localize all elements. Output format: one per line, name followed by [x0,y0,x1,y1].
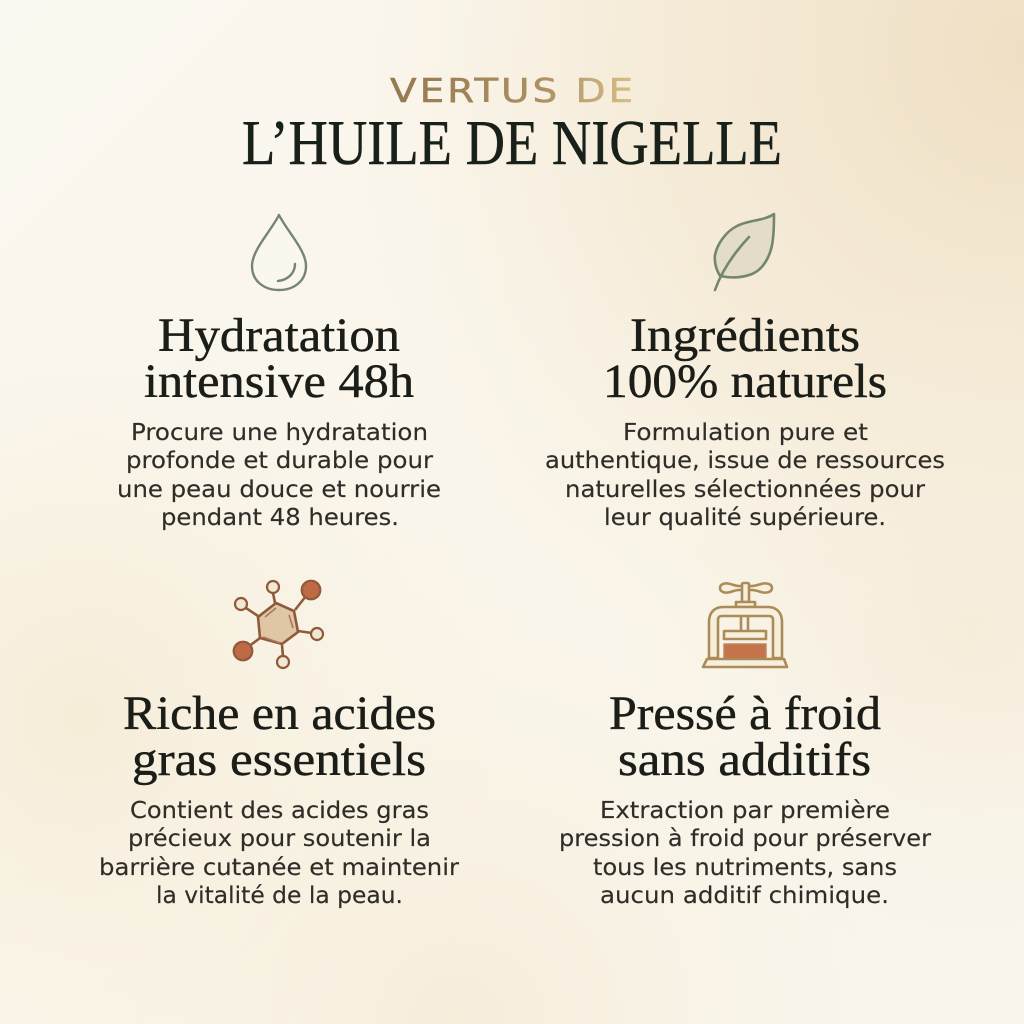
description: pendant 48 heures. [161,503,399,531]
panel: acides gras [99,581,459,909]
description: barrière cutanée et maintenir [99,853,459,881]
description: tous les nutriments, sans [593,853,897,881]
description [559,796,931,909]
heading: intensive 48h [144,355,414,408]
heading [603,309,887,408]
heading: Riche en acides [123,687,436,740]
description: Formulation pure et [623,418,868,446]
description: précieux pour soutenir la [128,824,431,852]
description: pression à froid pour préserver [559,824,931,852]
description [99,796,459,909]
description: aucun additif chimique. [600,881,889,909]
icon: leaf [715,214,774,290]
description: une peau douce et nourrie [117,475,441,503]
description: Procure une hydratation [131,418,428,446]
icon: press [703,583,787,667]
panel: hydratation [117,215,441,531]
heading: 100% naturels [603,355,887,408]
icon: molecule [234,581,323,668]
heading [123,687,436,786]
heading: Pressé à froid [609,687,881,740]
description: Extraction par première [600,796,890,824]
description: la vitalité de la peau. [156,881,403,909]
heading [144,309,414,408]
description [117,418,441,531]
description: naturelles sélectionnées pour [565,475,925,503]
heading [609,687,881,786]
title eyebrow: VERTUS DE [390,71,636,110]
description: leur qualité supérieure. [604,503,886,531]
title [242,71,782,178]
panel: ingredients [545,214,945,531]
heading: Ingrédients [630,309,860,362]
panel: presse a froid [559,583,931,909]
description: Contient des acides gras [130,796,429,824]
description: profonde et durable pour [126,446,433,474]
description [545,418,945,531]
heading: gras essentiels [132,733,426,786]
icon: water drop [252,215,306,290]
heading: sans additifs [618,733,871,786]
description: authentique, issue de ressources [545,446,945,474]
heading: Hydratation [158,309,400,362]
title main: L’HUILE DE NIGELLE [242,108,782,178]
